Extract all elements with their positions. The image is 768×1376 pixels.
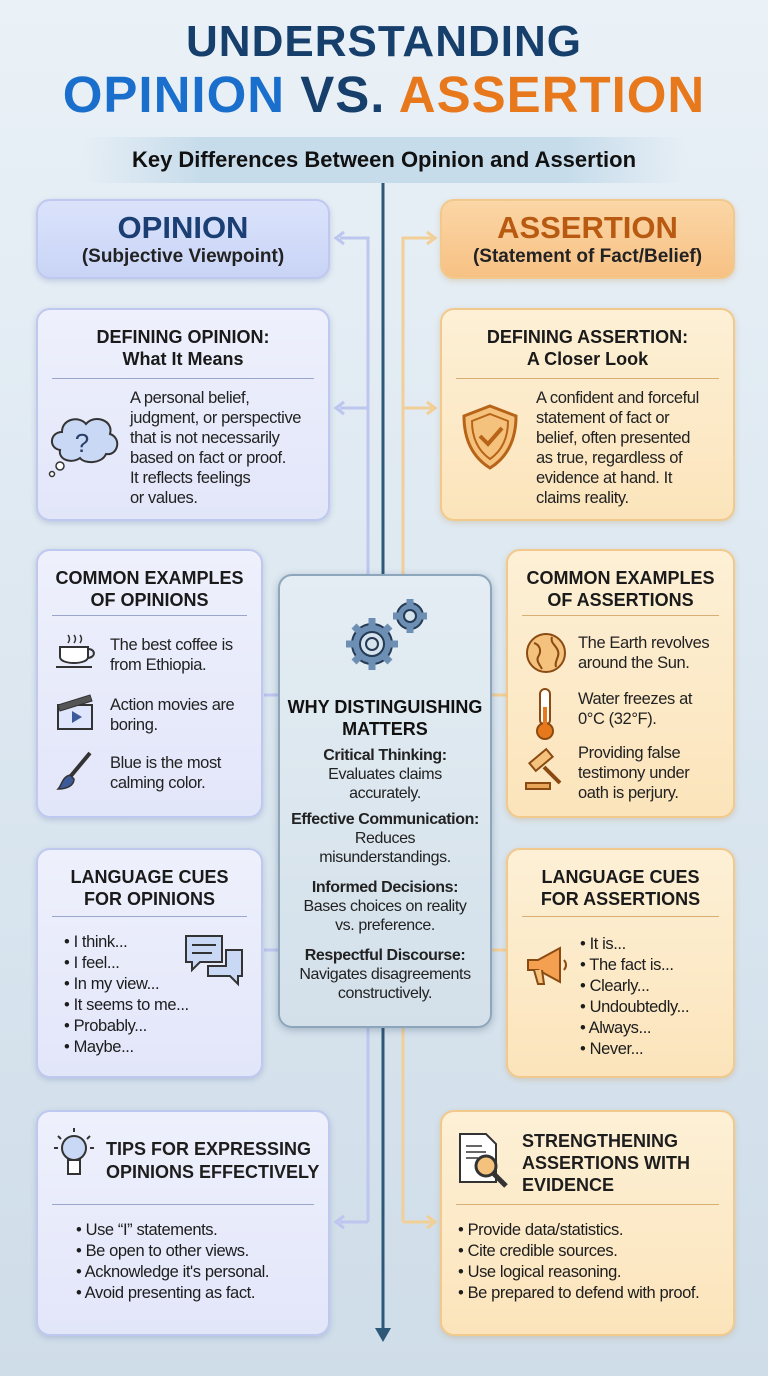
panel: defining assertion: A confident and forceful bbox=[536, 389, 699, 407]
panel: why distinguishing matters: WHY DISTINGUISHING bbox=[288, 697, 482, 717]
panel: examples of opinions: Action movies are bbox=[110, 696, 234, 714]
panel: examples of opinions: OF OPINIONS bbox=[90, 590, 208, 610]
panel: tips opinions bbox=[36, 1110, 330, 1336]
panel: why distinguishing matters: constructively. bbox=[338, 985, 432, 1002]
panel: language cues opinions: Maybe... bbox=[74, 1038, 134, 1056]
panel: strengthening assertions: STRENGTHENING bbox=[522, 1131, 678, 1151]
panel: strengthening assertions: Use logical reasoning. bbox=[468, 1263, 621, 1281]
panel: language cues assertions: LANGUAGE CUES bbox=[541, 867, 700, 887]
panel: defining assertion bbox=[440, 308, 735, 521]
panel: why distinguishing matters: Respectful Discourse: bbox=[305, 947, 465, 964]
panel: why distinguishing matters: Reduces bbox=[355, 830, 415, 847]
panel: tips opinions: Acknowledge it's personal. bbox=[85, 1263, 269, 1281]
icon: thought bubble bbox=[48, 418, 118, 478]
panel: defining assertion: statement of fact or bbox=[536, 409, 669, 427]
panel: defining opinion: based on fact or proof. bbox=[130, 449, 286, 467]
panel: language cues assertions: Undoubtedly... bbox=[590, 998, 689, 1016]
panel: tips opinions: TIPS FOR EXPRESSING bbox=[106, 1139, 311, 1159]
icon: thermometer bbox=[536, 688, 554, 740]
panel: examples of assertions: The Earth revolves bbox=[578, 634, 709, 652]
panel: language cues assertions: Always... bbox=[589, 1019, 651, 1037]
icon: shield bbox=[462, 404, 518, 470]
panel: defining opinion: A personal belief, bbox=[130, 389, 249, 407]
icon: lightbulb bbox=[54, 1128, 94, 1175]
panel: language cues opinions: Probably... bbox=[74, 1017, 147, 1035]
icon: speech bubbles bbox=[185, 935, 243, 986]
panel: defining opinion: What It Means bbox=[122, 349, 244, 369]
panel: why distinguishing matters: Evaluates claims bbox=[328, 766, 442, 783]
panel: strengthening assertions: EVIDENCE bbox=[522, 1175, 614, 1195]
icon: globe bbox=[526, 633, 566, 673]
panel: why distinguishing matters: Effective Communication: bbox=[291, 811, 479, 828]
title bbox=[63, 17, 705, 123]
panel: language cues opinions: LANGUAGE CUES bbox=[70, 867, 228, 887]
panel: why distinguishing matters: Critical Thinking: bbox=[323, 747, 447, 764]
panel: language cues opinions: I feel... bbox=[74, 954, 120, 972]
panel: why distinguishing matters bbox=[278, 574, 492, 1028]
icon: document magnifier bbox=[459, 1133, 508, 1188]
panel: language cues assertions bbox=[506, 848, 735, 1078]
panel: defining opinion: It reflects feelings bbox=[130, 469, 250, 487]
panel: examples of assertions: around the Sun. bbox=[578, 654, 689, 672]
subtitle band bbox=[80, 137, 688, 183]
header: opinion: OPINION bbox=[118, 210, 248, 245]
panel: strengthening assertions: Cite credible sources. bbox=[468, 1242, 617, 1260]
icon: gears bbox=[346, 599, 427, 670]
panel: defining opinion: that is not necessarily bbox=[130, 429, 279, 447]
title: UNDERSTANDING bbox=[186, 17, 582, 66]
panel: examples of opinions: The best coffee is bbox=[110, 636, 233, 654]
panel: language cues assertions: Clearly... bbox=[590, 977, 649, 995]
header: opinion bbox=[36, 199, 330, 279]
panel: defining assertion: claims reality. bbox=[536, 489, 629, 507]
panel: language cues opinions: I think... bbox=[74, 933, 127, 951]
panel: language cues opinions bbox=[36, 848, 263, 1078]
panel: defining opinion: DEFINING OPINION: bbox=[96, 327, 270, 347]
header: assertion bbox=[440, 199, 735, 279]
panel: why distinguishing matters: misunderstandings. bbox=[319, 849, 451, 866]
panel: examples of opinions: boring. bbox=[110, 716, 158, 734]
panel: why distinguishing matters: Bases choices on reality bbox=[304, 898, 466, 915]
panel: examples of assertions bbox=[506, 549, 735, 818]
panel: why distinguishing matters: accurately. bbox=[349, 785, 421, 802]
panel: examples of assertions: testimony under bbox=[578, 764, 689, 782]
panel: defining assertion: A Closer Look bbox=[527, 349, 648, 369]
panel: why distinguishing matters: vs. preference. bbox=[335, 917, 435, 934]
panel: examples of assertions: Water freezes at bbox=[578, 690, 692, 708]
header: opinion: (Subjective Viewpoint) bbox=[82, 246, 284, 267]
icon: coffee cup bbox=[56, 634, 95, 668]
panel: defining opinion: or values. bbox=[130, 489, 198, 507]
panel: why distinguishing matters: Informed Decisions: bbox=[312, 879, 458, 896]
panel: language cues assertions: It is... bbox=[590, 935, 626, 953]
panel: defining assertion: DEFINING ASSERTION: bbox=[487, 327, 688, 347]
panel: defining assertion: belief, often presented bbox=[536, 429, 690, 447]
panel: language cues assertions: Never... bbox=[590, 1040, 643, 1058]
panel: examples of assertions: COMMON EXAMPLES bbox=[526, 568, 714, 588]
panel: examples of opinions: from Ethiopia. bbox=[110, 656, 206, 674]
panel: strengthening assertions: Be prepared to defend with proof. bbox=[468, 1284, 699, 1302]
panel: examples of opinions bbox=[36, 549, 263, 818]
panel: why distinguishing matters: MATTERS bbox=[342, 719, 428, 739]
header: assertion: ASSERTION bbox=[497, 210, 678, 245]
panel: examples of opinions: COMMON EXAMPLES bbox=[55, 568, 244, 588]
icon: clapperboard bbox=[57, 694, 93, 730]
panel: strengthening assertions: Provide data/statistics. bbox=[468, 1221, 623, 1239]
header: assertion: (Statement of Fact/Belief) bbox=[473, 246, 702, 267]
icon: paintbrush bbox=[56, 752, 92, 790]
panel: examples of opinions: Blue is the most bbox=[110, 754, 221, 772]
panel: tips opinions: Use “I” statements. bbox=[86, 1221, 217, 1239]
panel: language cues opinions: In my view... bbox=[74, 975, 159, 993]
subtitle band: Key Differences Between Opinion and Assertion bbox=[132, 147, 636, 172]
panel: defining assertion: evidence at hand. It bbox=[536, 469, 672, 487]
panel: language cues opinions: FOR OPINIONS bbox=[84, 889, 215, 909]
panel: why distinguishing matters: Navigates disagreements bbox=[299, 966, 471, 983]
icon: thought bubble: ? bbox=[75, 428, 89, 458]
panel: examples of assertions: OF ASSERTIONS bbox=[547, 590, 694, 610]
title: OPINION VS. ASSERTION bbox=[63, 66, 705, 123]
panel: tips opinions: OPINIONS EFFECTIVELY bbox=[106, 1162, 319, 1182]
panel: language cues opinions: It seems to me... bbox=[74, 996, 189, 1014]
panel: tips opinions: Avoid presenting as fact. bbox=[85, 1284, 255, 1302]
panel: defining opinion bbox=[36, 308, 330, 521]
panel: examples of opinions: calming color. bbox=[110, 774, 205, 792]
panel: strengthening assertions: ASSERTIONS WITH bbox=[522, 1153, 690, 1173]
panel: examples of assertions: oath is perjury. bbox=[578, 784, 679, 802]
panel: strengthening assertions bbox=[440, 1110, 735, 1336]
panel: tips opinions: Be open to other views. bbox=[86, 1242, 249, 1260]
icon: megaphone bbox=[527, 946, 567, 985]
panel: examples of assertions: Providing false bbox=[578, 744, 680, 762]
panel: language cues assertions: The fact is... bbox=[589, 956, 674, 974]
icon: gavel bbox=[525, 748, 562, 790]
panel: examples of assertions: 0°C (32°F). bbox=[578, 710, 656, 728]
panel: defining assertion: as true, regardless of bbox=[536, 449, 682, 467]
panel: language cues assertions: FOR ASSERTIONS bbox=[541, 889, 700, 909]
panel: defining opinion: judgment, or perspective bbox=[130, 409, 301, 427]
